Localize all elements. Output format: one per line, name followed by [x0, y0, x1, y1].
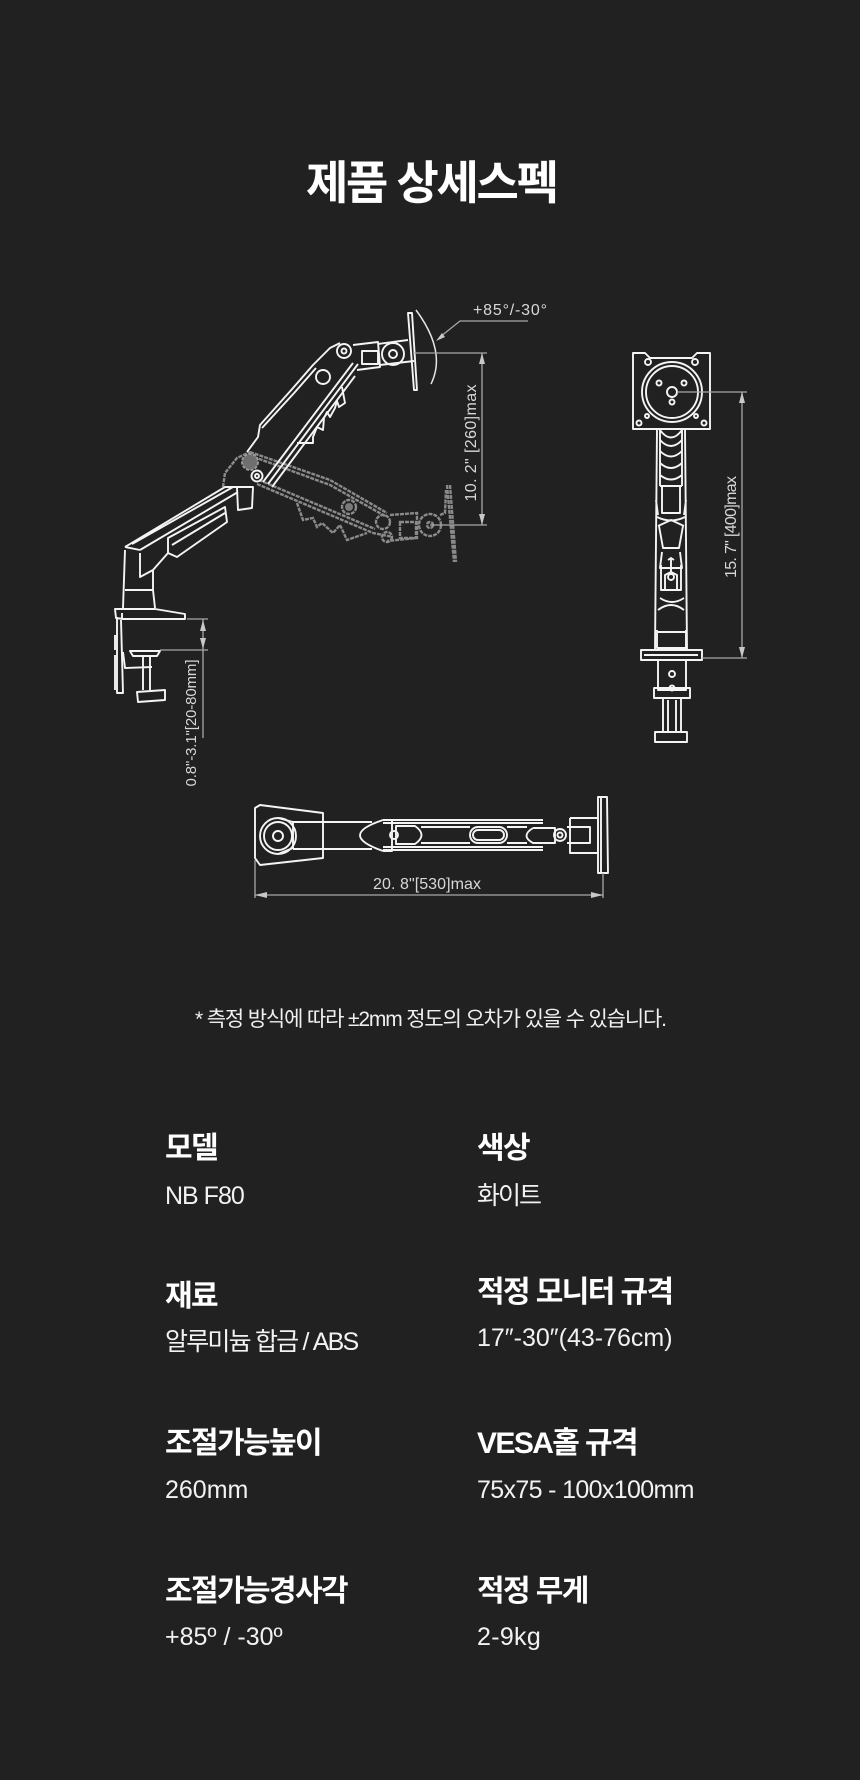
spec value: monitor size: 17″-30″(43-76cm) — [477, 1324, 673, 1352]
spec: VESA: VESA홀 규격 — [477, 1427, 637, 1460]
dimension: clamp range: 0.8"-3.1"[20-80mm] — [183, 660, 200, 786]
spec value: model: NB F80 — [165, 1182, 244, 1210]
spec: model: 모델 — [165, 1132, 217, 1165]
drawing: side view arm, raised position — [242, 313, 417, 487]
spec value: VESA: 75x75 - 100x100mm — [477, 1476, 694, 1504]
spec value: tilt angle: +85º / -30º — [165, 1623, 283, 1651]
spec value: material: 알루미늄 합금 / ABS — [165, 1328, 357, 1356]
dimension: total height 15.7 inch — [677, 392, 747, 658]
spec value: adjustable height: 260mm — [165, 1476, 248, 1504]
dimension: reach 20.8 inch: 20. 8"[530]max — [373, 876, 481, 893]
dimension: reach 20.8 inch — [255, 860, 603, 898]
spec value: color: 화이트 — [477, 1182, 540, 1210]
dimension: clamp range — [160, 619, 208, 786]
drawing: front view — [633, 353, 710, 742]
tilt angle callout: +85°/-30° — [473, 302, 547, 319]
drawing: lower arm, post and desk clamp — [115, 487, 253, 702]
spec: weight: 적정 무게 — [477, 1575, 588, 1608]
dimension: total height 15.7 inch: 15. 7" [400]max — [723, 476, 740, 578]
dimension: height 10.2 inch — [413, 353, 487, 525]
technical drawings — [114, 302, 747, 898]
spec: tilt angle: 조절가능경사각 — [165, 1575, 347, 1608]
title: 제품 상세스펙 — [306, 157, 557, 209]
tilt angle callout — [416, 302, 547, 384]
spec: material: 재료 — [165, 1280, 217, 1313]
spec: color: 색상 — [477, 1132, 529, 1165]
measurement note: * 측정 방식에 따라 ±2mm 정도의 오차가 있을 수 있습니다. — [195, 1008, 666, 1031]
drawing: top view — [255, 797, 608, 873]
spec value: weight: 2-9kg — [477, 1623, 541, 1651]
spec: adjustable height: 조절가능높이 — [165, 1427, 321, 1460]
spec: monitor size: 적정 모니터 규격 — [477, 1276, 672, 1309]
dimension: height 10.2 inch: 10. 2" [260]max — [463, 384, 480, 502]
drawing: side view arm, lowered position — [223, 452, 456, 562]
